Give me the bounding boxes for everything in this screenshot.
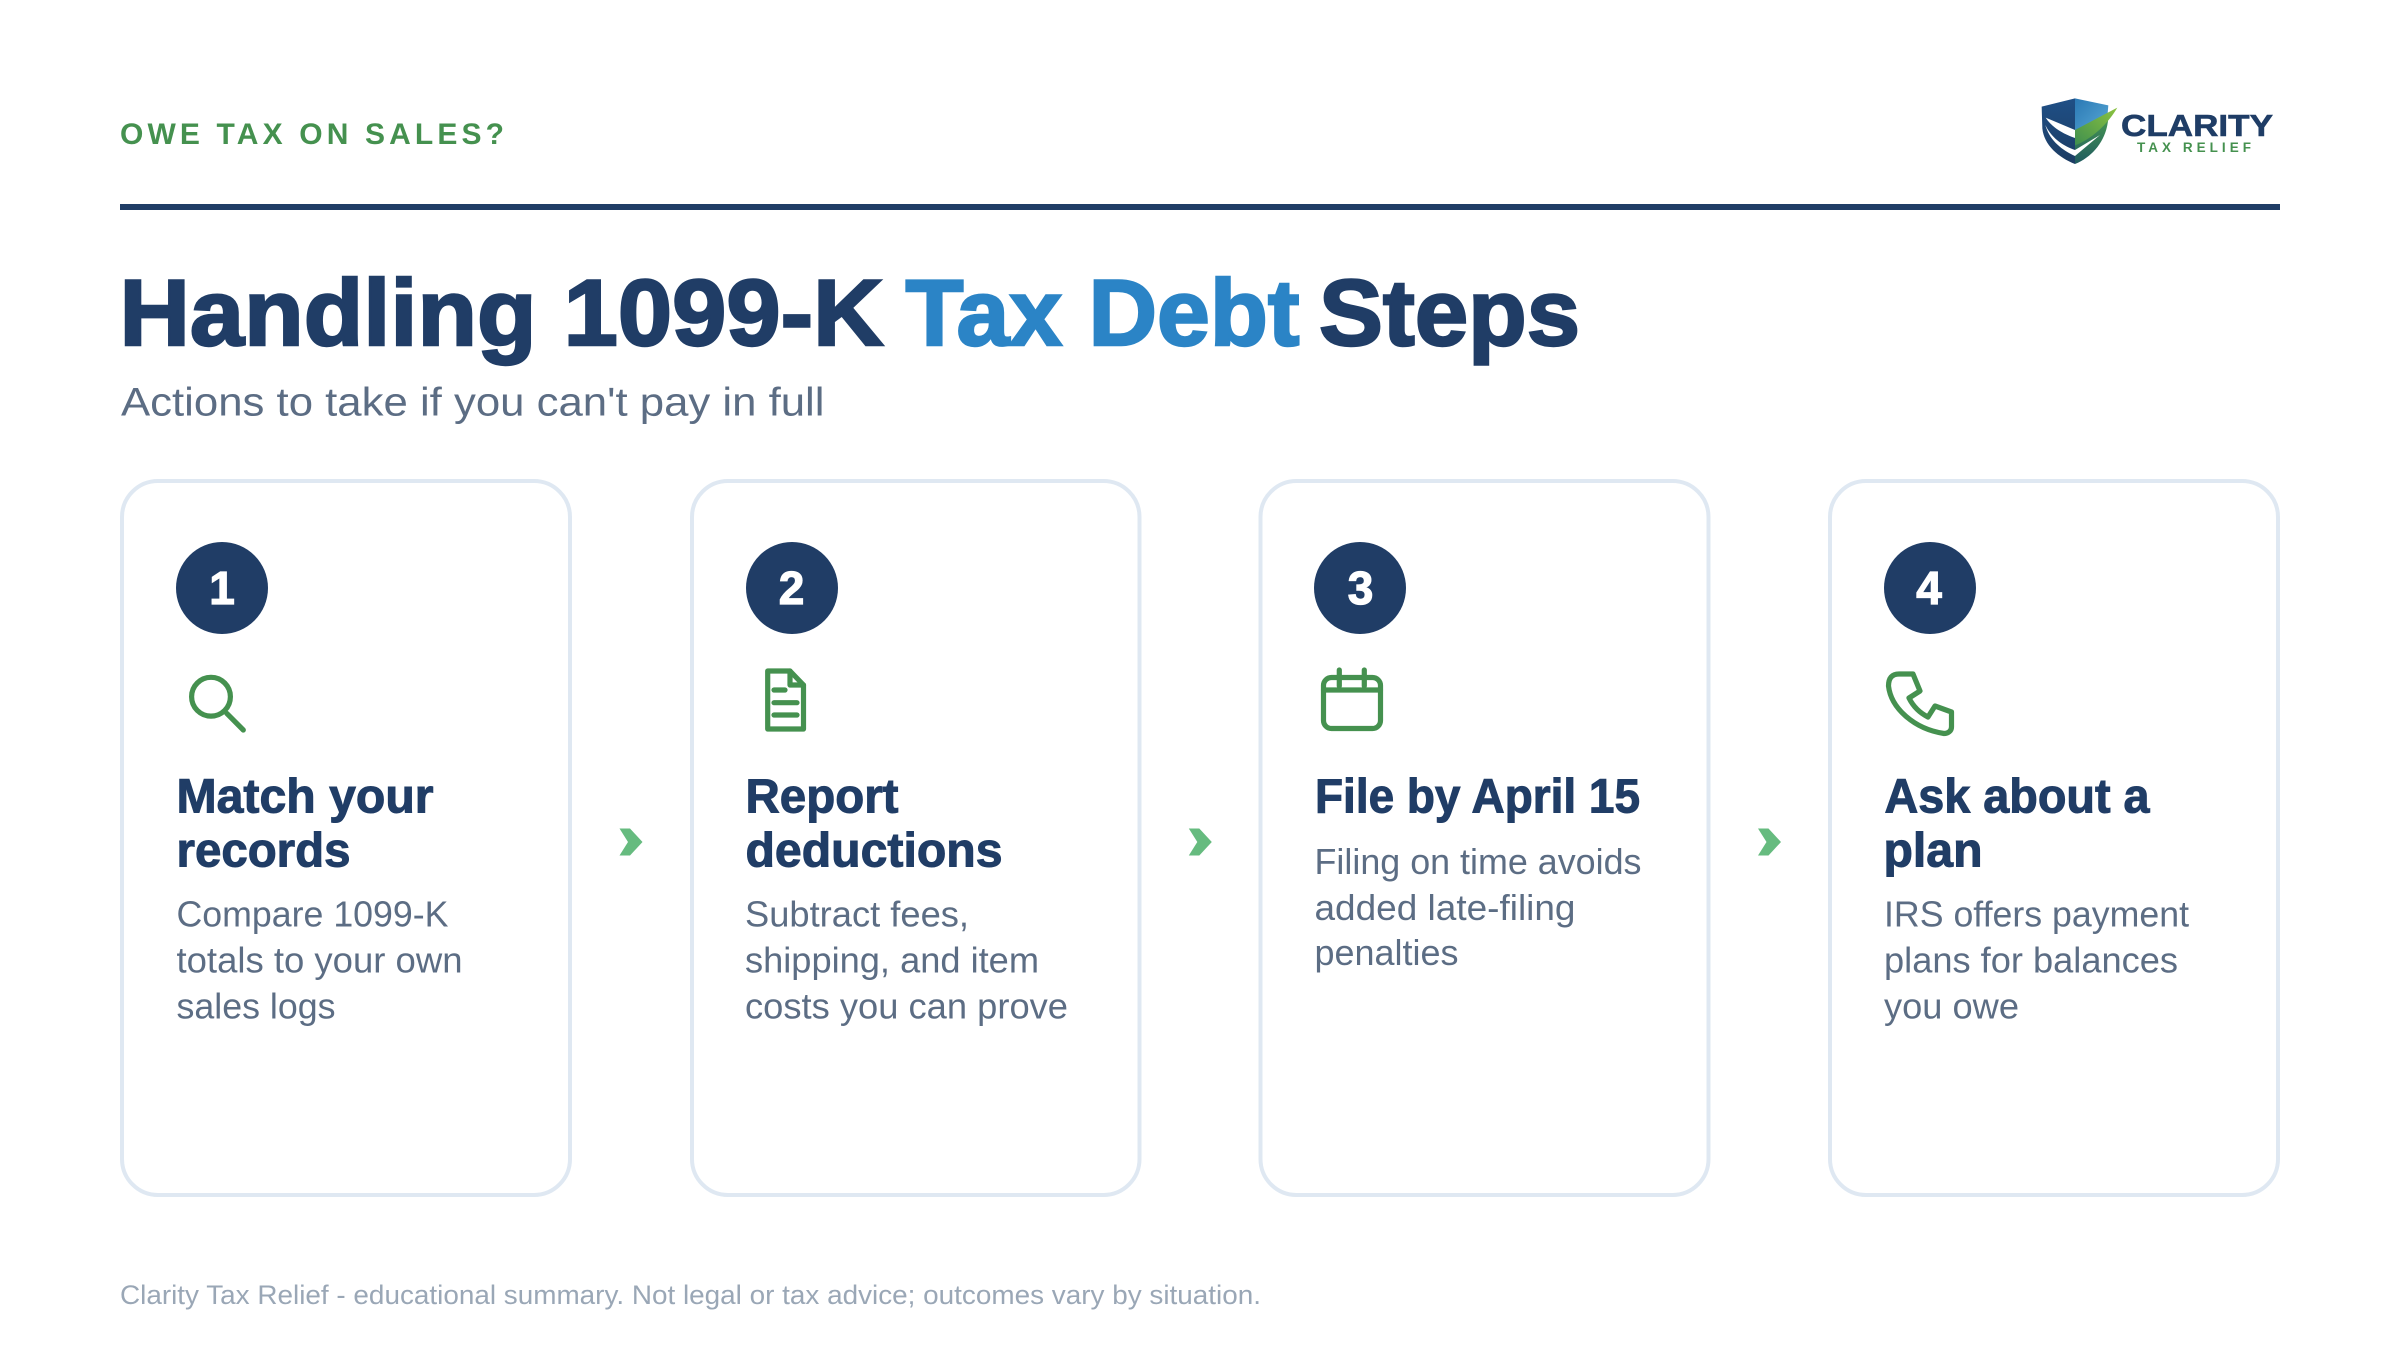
step 4 body: IRS offers payment [1884, 894, 2189, 934]
step 1 body: totals to your own [176, 940, 462, 980]
step 2 body [745, 894, 1068, 1026]
step 2 number badge: 2 [779, 562, 804, 614]
title [120, 260, 1580, 365]
step 4 number badge: 4 [1916, 562, 1942, 614]
icon: document [768, 671, 804, 729]
step 3 heading: File by April 15 [1315, 770, 1640, 824]
step 3 number badge [1314, 542, 1406, 634]
step 1 heading [176, 770, 434, 878]
title: Steps [1319, 260, 1580, 365]
step 2 body: shipping, and item [745, 940, 1039, 980]
arrow 2 to 3 [1189, 828, 1212, 856]
step 3 body [1314, 841, 1642, 973]
step 2 heading: deductions [746, 824, 1002, 878]
step 4 body: you owe [1884, 986, 2019, 1026]
step 2 number badge [746, 542, 838, 634]
step 2 heading [746, 770, 1002, 878]
step 1 body [176, 894, 462, 1026]
title: Handling 1099-K [120, 260, 884, 365]
panel: step 2 [692, 481, 1140, 1195]
step 4 body: plans for balances [1884, 940, 2178, 980]
logo: Clarity Tax Relief [2042, 98, 2273, 164]
step 4 heading: plan [1884, 824, 1982, 878]
step 1 body: Compare 1099-K [176, 894, 448, 934]
panel: step 4 [1830, 481, 2278, 1195]
step 4 heading: Ask about a [1884, 770, 2150, 824]
arrow 3 to 4 [1758, 828, 1781, 856]
logo shield mark [2042, 98, 2117, 164]
step 3 body: penalties [1314, 932, 1458, 973]
step 3 body: added late-filing [1314, 887, 1576, 928]
header rule [120, 204, 2280, 210]
logo wordmark: CLARITY [2121, 108, 2273, 143]
logo tagline: TAX RELIEF [2137, 140, 2251, 155]
step 1 body: sales logs [176, 986, 336, 1026]
step 1 heading: Match your [176, 770, 434, 824]
step 3 body: Filing on time avoids [1314, 841, 1642, 882]
panel: step 1 [122, 481, 570, 1195]
step 2 heading: Report [746, 770, 899, 824]
step 1 heading: records [176, 824, 350, 878]
step 2 body: costs you can prove [745, 986, 1068, 1026]
panel: step 3 [1260, 481, 1708, 1195]
step 4 number badge [1884, 542, 1976, 634]
arrow 1 to 2 [620, 828, 642, 856]
subtitle: Actions to take if you can't pay in full [121, 380, 824, 424]
icon: calendar [1324, 670, 1380, 728]
icon: phone [1888, 674, 1952, 734]
step 2 body: Subtract fees, [745, 894, 969, 934]
icon: magnifying glass [192, 677, 243, 730]
title: Tax Debt [906, 260, 1300, 365]
footer disclaimer: Clarity Tax Relief - educational summary. Not legal or tax advice; outcomes vary by situation. [120, 1280, 1261, 1310]
eyebrow: Owe tax on sales?: OWE TAX ON SALES? [120, 118, 504, 151]
step 1 number badge [176, 542, 268, 634]
step 4 body [1884, 894, 2189, 1026]
step 3 number badge: 3 [1348, 562, 1373, 614]
step 4 heading [1884, 770, 2150, 878]
step 1 number badge: 1 [209, 562, 235, 614]
